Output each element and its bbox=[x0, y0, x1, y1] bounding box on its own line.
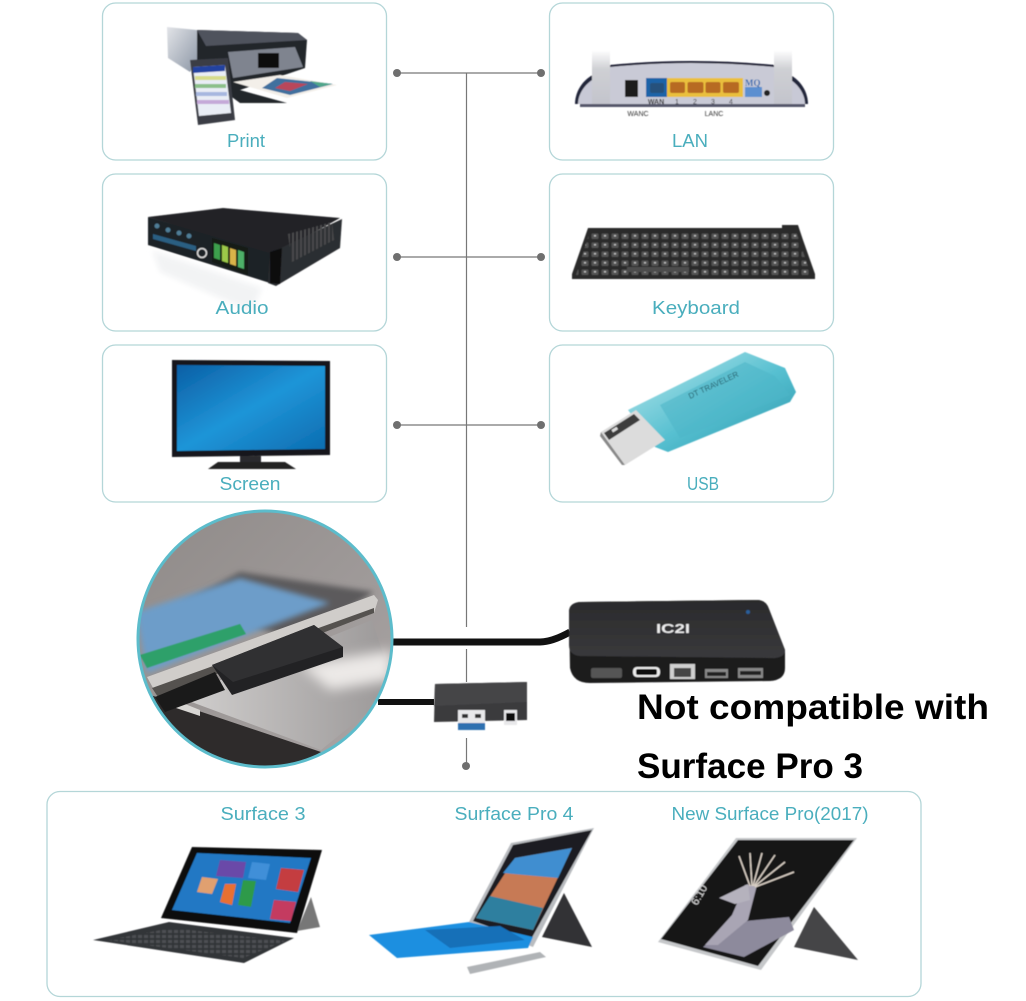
label: Surface Pro 4: Surface Pro 4 bbox=[454, 804, 574, 824]
cable: USB adapter bbox=[378, 699, 434, 705]
icon: printer and phone bbox=[167, 27, 337, 125]
label: Print: Print bbox=[227, 131, 265, 151]
label: New Surface Pro 2017: New Surface Pro(2017) bbox=[672, 804, 868, 824]
device: Surface 3 bbox=[93, 847, 322, 963]
hub ports bbox=[591, 664, 763, 679]
icon: router rear: MQ bbox=[745, 78, 760, 88]
icon: USB stick bbox=[600, 352, 796, 465]
panel: Print bbox=[102, 3, 386, 160]
icon: router rear: 4 bbox=[729, 99, 733, 106]
panel: Audio bbox=[102, 174, 386, 331]
panel: Keyboard bbox=[550, 174, 834, 331]
label: Keyboard: Keyboard bbox=[652, 298, 740, 318]
callout: magnified tablet connection bbox=[135, 508, 395, 775]
panel: compatible devices bbox=[47, 792, 921, 996]
panel: USB bbox=[550, 345, 834, 502]
icon: router rear: WANC bbox=[627, 111, 649, 118]
icon: keyboard bbox=[572, 225, 815, 279]
device: New Surface Pro bbox=[658, 838, 858, 970]
icon: router rear: 3 bbox=[711, 99, 715, 106]
callout: not compatible note: Surface Pro 3 bbox=[637, 747, 863, 786]
hub status light bbox=[746, 610, 750, 614]
label: Audio: Audio bbox=[216, 298, 268, 318]
device: New Surface Pro: 6:10 bbox=[689, 883, 710, 908]
label: LAN: LAN bbox=[672, 131, 708, 151]
panel: Screen bbox=[102, 345, 386, 502]
label: USB: USB bbox=[687, 474, 719, 494]
icon: USB stick: DT TRAVELER bbox=[687, 370, 740, 401]
icon: router rear: 1 bbox=[675, 99, 679, 106]
icon: audio interface bbox=[148, 208, 342, 312]
hub device bbox=[569, 600, 785, 683]
label: Surface 3: Surface 3 bbox=[220, 804, 306, 824]
callout: not compatible note bbox=[637, 688, 989, 786]
cable: hub to dongle bbox=[393, 632, 570, 642]
icon: router rear: LANC bbox=[705, 111, 723, 118]
icon: router rear: WAN bbox=[648, 99, 664, 106]
icon: router rear: 2 bbox=[693, 99, 697, 106]
icon: monitor bbox=[172, 360, 330, 469]
callout: not compatible note: Not compatible with bbox=[637, 688, 989, 727]
device: Surface Pro 4 bbox=[369, 828, 594, 974]
hub logo: IC2I bbox=[656, 621, 690, 636]
USB and mini DisplayPort adapter bbox=[434, 682, 527, 730]
label: Screen: Screen bbox=[220, 474, 280, 494]
panel: LAN bbox=[550, 3, 834, 160]
connector lines bbox=[393, 69, 545, 770]
icon: router rear bbox=[575, 50, 808, 118]
